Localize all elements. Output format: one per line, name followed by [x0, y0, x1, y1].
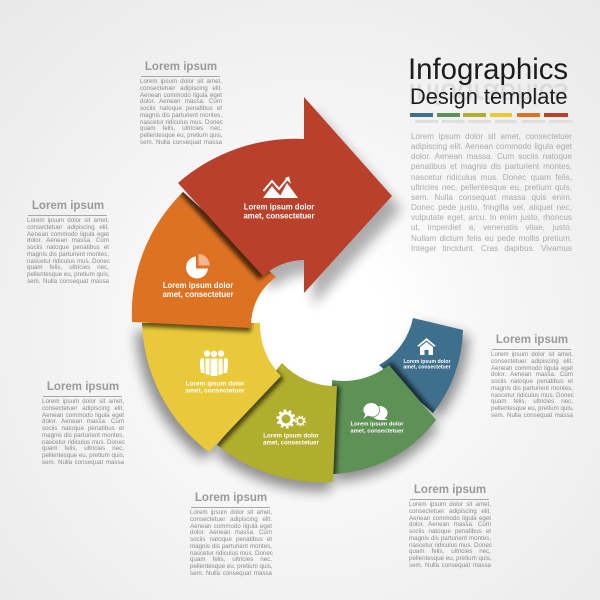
text block: top: quam felis, ultricies nec, — [140, 125, 222, 132]
text block: upper left: consectetuer adipiscing elit. — [27, 224, 109, 231]
text block: upper left: nascetur ridiculus mus. Donec — [27, 258, 110, 265]
intro paragraph: sem. Nulla consequat massa quis enim. — [411, 193, 572, 202]
text block: lower left: nascetur ridiculus mus. Donec — [42, 439, 125, 446]
text block: top: nascetur ridiculus mus. Donec — [140, 119, 223, 126]
label: yellow segment: Lorem ipsum dolor — [186, 380, 245, 388]
icon: pie chart — [186, 254, 210, 278]
label: orange segment: Lorem ipsum dolor — [163, 281, 233, 290]
text block: top: pellentesque eu, pretium quis, — [140, 132, 223, 139]
text block: lower left: dolor. Aenean massa. Cum — [42, 418, 124, 425]
text block: upper left: magnis dis parturient montes, — [27, 251, 109, 258]
text block: lower right: consectetuer adipiscing elit. — [409, 508, 491, 515]
intro paragraph: Donec pede justo, fringilla vel, aliquet nec, — [411, 203, 572, 212]
segment 5: green — [332, 362, 439, 474]
text block: top — [140, 61, 223, 146]
intro paragraph: ut, imperdiet a, venenatis vitae, justo. — [411, 223, 572, 232]
text block: bottom: sociis natoque penatibus et — [190, 536, 272, 543]
text block: lower left: consectetuer adipiscing elit. — [42, 405, 124, 412]
text block: bottom: consectetuer adipiscing elit. — [190, 516, 272, 523]
text block: bottom: sem. Nulla consequat massa — [190, 570, 272, 577]
label: red segment — [243, 202, 315, 220]
icon: people — [200, 350, 228, 376]
text block: right: quam felis, ultricies nec, — [491, 398, 573, 405]
text block: top: Aenean commodo ligula eget — [140, 92, 222, 99]
intro paragraph: nascetur ridiculus mus. Donec quam felis, — [411, 173, 572, 182]
text block: bottom: nascetur ridiculus mus. Donec — [190, 550, 273, 557]
intro paragraph: vulputate eget, arcu. In enim justo, rhoncus — [411, 213, 572, 222]
text block: lower right: Lorem ipsum — [414, 484, 486, 496]
text block: right: nascetur ridiculus mus. Donec — [491, 392, 574, 399]
text block: right: pellentesque eu, pretium quis, — [491, 405, 574, 412]
segment 2: orange — [132, 192, 276, 332]
intro paragraph: adipiscing elit. Aenean commodo ligula eget — [411, 142, 572, 151]
text block: right: magnis dis parturient montes, — [491, 385, 573, 392]
text block: upper left: sociis natoque penatibus et — [27, 244, 109, 251]
label: green segment — [350, 422, 404, 434]
segment 4: olive — [217, 363, 340, 482]
text block: lower right: Aenean commodo ligula eget — [409, 515, 491, 522]
label: olive segment: Lorem ipsum dolor — [263, 432, 319, 440]
text block: upper left — [27, 200, 110, 285]
text block: bottom — [190, 492, 273, 577]
text block: lower left: Lorem ipsum dolor sit amet, — [42, 398, 124, 405]
text block: lower left: quam felis, ultricies nec, — [42, 445, 124, 452]
intro paragraph: dolor. Aenean massa. Cum sociis natoque — [411, 152, 572, 161]
text block: upper left: Lorem ipsum — [32, 200, 104, 212]
outer soft shadows — [136, 110, 469, 491]
text block: lower right: magnis dis parturient montes, — [409, 535, 491, 542]
text block: lower left: sem. Nulla consequat massa — [42, 459, 124, 466]
intro paragraph — [411, 132, 572, 253]
label: green segment: Lorem ipsum dolor — [351, 422, 404, 428]
text block: top: sem. Nulla consequat massa — [140, 139, 222, 146]
label: yellow segment — [185, 380, 245, 394]
icon: home — [417, 338, 436, 355]
text block: bottom: dolor. Aenean massa. Cum — [190, 529, 272, 536]
text block: lower left: sociis natoque penatibus et — [42, 425, 124, 432]
label: red segment: amet, consectetuer — [243, 212, 315, 220]
text block: top: sociis natoque penatibus et — [140, 105, 222, 112]
text block: right — [491, 334, 574, 419]
text block: lower left: Lorem ipsum — [47, 381, 119, 393]
text block: right: Aenean commodo ligula eget — [491, 365, 573, 372]
intro paragraph: Nullam dictum felis eu pede mollis pretium. — [411, 234, 572, 243]
text block: lower left: Aenean commodo ligula eget — [42, 412, 124, 419]
segment 3: yellow — [142, 323, 284, 455]
text block: right: dolor. Aenean massa. Cum — [491, 371, 573, 378]
text block: right: consectetuer adipiscing elit. — [491, 358, 573, 365]
segment 1: red arrow — [174, 97, 392, 297]
intro paragraph: Lorem ipsum dolor sit amet, consectetuer — [411, 132, 572, 141]
text block: bottom: pellentesque eu, pretium quis, — [190, 563, 273, 570]
label: blue segment — [403, 359, 451, 370]
intro paragraph: penatibus et magnis dis parturient montes, — [411, 162, 572, 171]
text block: bottom: Aenean commodo ligula eget — [190, 523, 272, 530]
label: orange segment: amet, consectetuer — [162, 290, 234, 299]
text block: bottom: Lorem ipsum — [195, 492, 267, 504]
label: blue segment: amet, consectetuer — [403, 364, 451, 370]
label: orange segment — [162, 281, 234, 299]
label: olive segment: amet, consectetuer — [263, 440, 320, 446]
text block: lower right: sem. Nulla consequat massa — [409, 562, 491, 569]
text block: upper left: quam felis, ultricies nec, — [27, 264, 109, 271]
intro paragraph: Integer tincidunt. Cras dapibus. Vivamus — [411, 244, 572, 253]
title: Infographics: Infographics — [408, 53, 568, 86]
text block: lower right: pellentesque eu, pretium quis, — [409, 555, 492, 562]
text block: right: sociis natoque penatibus et — [491, 378, 573, 385]
segment 6: blue — [379, 318, 463, 413]
text block: lower right: quam felis, ultricies nec, — [409, 548, 491, 555]
text block: upper left: Lorem ipsum dolor sit amet, — [27, 217, 109, 224]
text block: lower right: dolor. Aenean massa. Cum — [409, 521, 491, 528]
title reflection: Infographics — [408, 77, 568, 110]
text block: top: Lorem ipsum dolor sit amet, — [140, 78, 222, 85]
label: blue segment: Lorem ipsum dolor — [404, 359, 450, 365]
icon: speech bubbles — [362, 402, 388, 420]
text block: top: consectetuer adipiscing elit. — [140, 85, 222, 92]
text block: upper left: pellentesque eu, pretium quis, — [27, 271, 110, 278]
circular arrow diagram — [129, 97, 476, 500]
text block: lower right — [409, 484, 492, 569]
label: olive segment — [263, 432, 320, 446]
label: yellow segment: amet, consectetuer — [185, 388, 245, 394]
icon: gears — [278, 410, 305, 428]
text block: lower left: pellentesque eu, pretium quis, — [42, 452, 125, 459]
text block: upper left: sem. Nulla consequat massa — [27, 278, 109, 285]
label: green segment: amet, consectetuer — [350, 428, 404, 434]
text block: right: Lorem ipsum — [496, 334, 568, 346]
text block: top: magnis dis parturient montes, — [140, 112, 222, 119]
text block: top: dolor. Aenean massa. Cum — [140, 98, 222, 105]
text block: lower right: nascetur ridiculus mus. Donec — [409, 542, 492, 549]
text block: lower right: Lorem ipsum dolor sit amet, — [409, 501, 491, 508]
text block: bottom: magnis dis parturient montes, — [190, 543, 272, 550]
label: red segment: Lorem ipsum dolor — [244, 202, 314, 212]
colour bar strip — [410, 113, 573, 123]
text block: bottom: Lorem ipsum dolor sit amet, — [190, 509, 272, 516]
text block: lower right: sociis natoque penatibus et — [409, 528, 491, 535]
text block: top: Lorem ipsum — [145, 61, 217, 73]
text block: bottom: quam felis, ultricies nec, — [190, 556, 272, 563]
text block: lower left: magnis dis parturient montes, — [42, 432, 124, 439]
icon: mountain chart — [263, 176, 298, 198]
text block: upper left: Aenean commodo ligula eget — [27, 231, 109, 238]
text block: right: Lorem ipsum dolor sit amet, — [491, 351, 573, 358]
text block: right: sem. Nulla consequat massa — [491, 412, 573, 419]
text block: upper left: dolor. Aenean massa. Cum — [27, 237, 109, 244]
text block: lower left — [42, 381, 125, 466]
subtitle: Design template: Design template — [410, 84, 568, 109]
intro paragraph: ultricies nec, pellentesque eu, pretium quis, — [411, 183, 572, 192]
